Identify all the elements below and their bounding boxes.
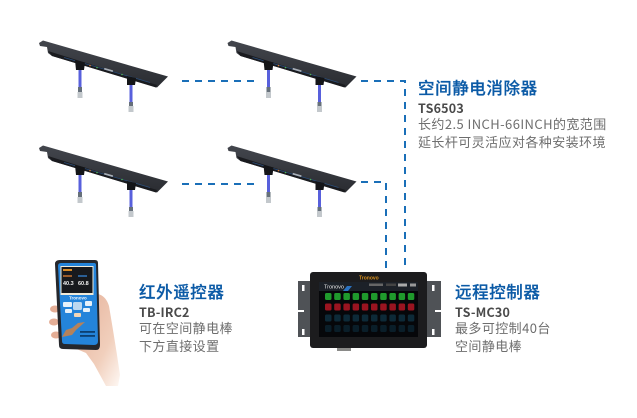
text block: remote controller — [455, 279, 551, 355]
dashed connector: lower bar to controller — [361, 182, 386, 268]
model: TB-IRC2: TB-IRC2 — [139, 302, 190, 321]
description line 2: 下方直接设置 — [139, 336, 220, 355]
heading: remote controller: 远程控制器 — [455, 279, 540, 303]
text block: static eliminator — [418, 75, 607, 151]
static eliminator bar: bottom left — [39, 146, 168, 217]
LED status grid — [325, 293, 414, 332]
dashed connector: bottom row — [182, 183, 256, 185]
model: TS6503: TS6503 — [418, 98, 464, 117]
remote controller device: Tronovo — [324, 284, 344, 290]
heading: infrared remote: 红外遥控器 — [139, 279, 224, 303]
static eliminator bar: bottom right — [228, 146, 356, 217]
infrared remote in hand — [49, 260, 120, 386]
model: TS-MC30: TS-MC30 — [455, 302, 510, 321]
heading: static eliminator: 空间静电消除器 — [418, 75, 538, 99]
description line 1: 长约2.5 INCH-66INCH的宽范围 — [418, 114, 607, 133]
description line 2: 空间静电棒 — [455, 336, 522, 355]
static eliminator bar: top left — [39, 40, 168, 112]
remote controller device — [298, 272, 441, 351]
dashed connector: top row — [182, 80, 256, 82]
infrared remote in hand: 40.3 — [63, 281, 74, 287]
static eliminator bar: top right — [228, 40, 356, 112]
description line 1: 最多可控制40台 — [455, 318, 551, 337]
description line 2: 延长杆可灵活应对各种安装环境 — [418, 132, 606, 151]
text block: infrared remote — [139, 279, 233, 355]
description line 1: 可在空间静电棒 — [139, 318, 233, 337]
infrared remote in hand: Tronovo — [69, 296, 87, 300]
dashed connector: top bar to controller — [361, 81, 405, 268]
infrared remote in hand: 60.8 — [78, 281, 89, 287]
remote controller device: Tronovo — [359, 276, 379, 282]
